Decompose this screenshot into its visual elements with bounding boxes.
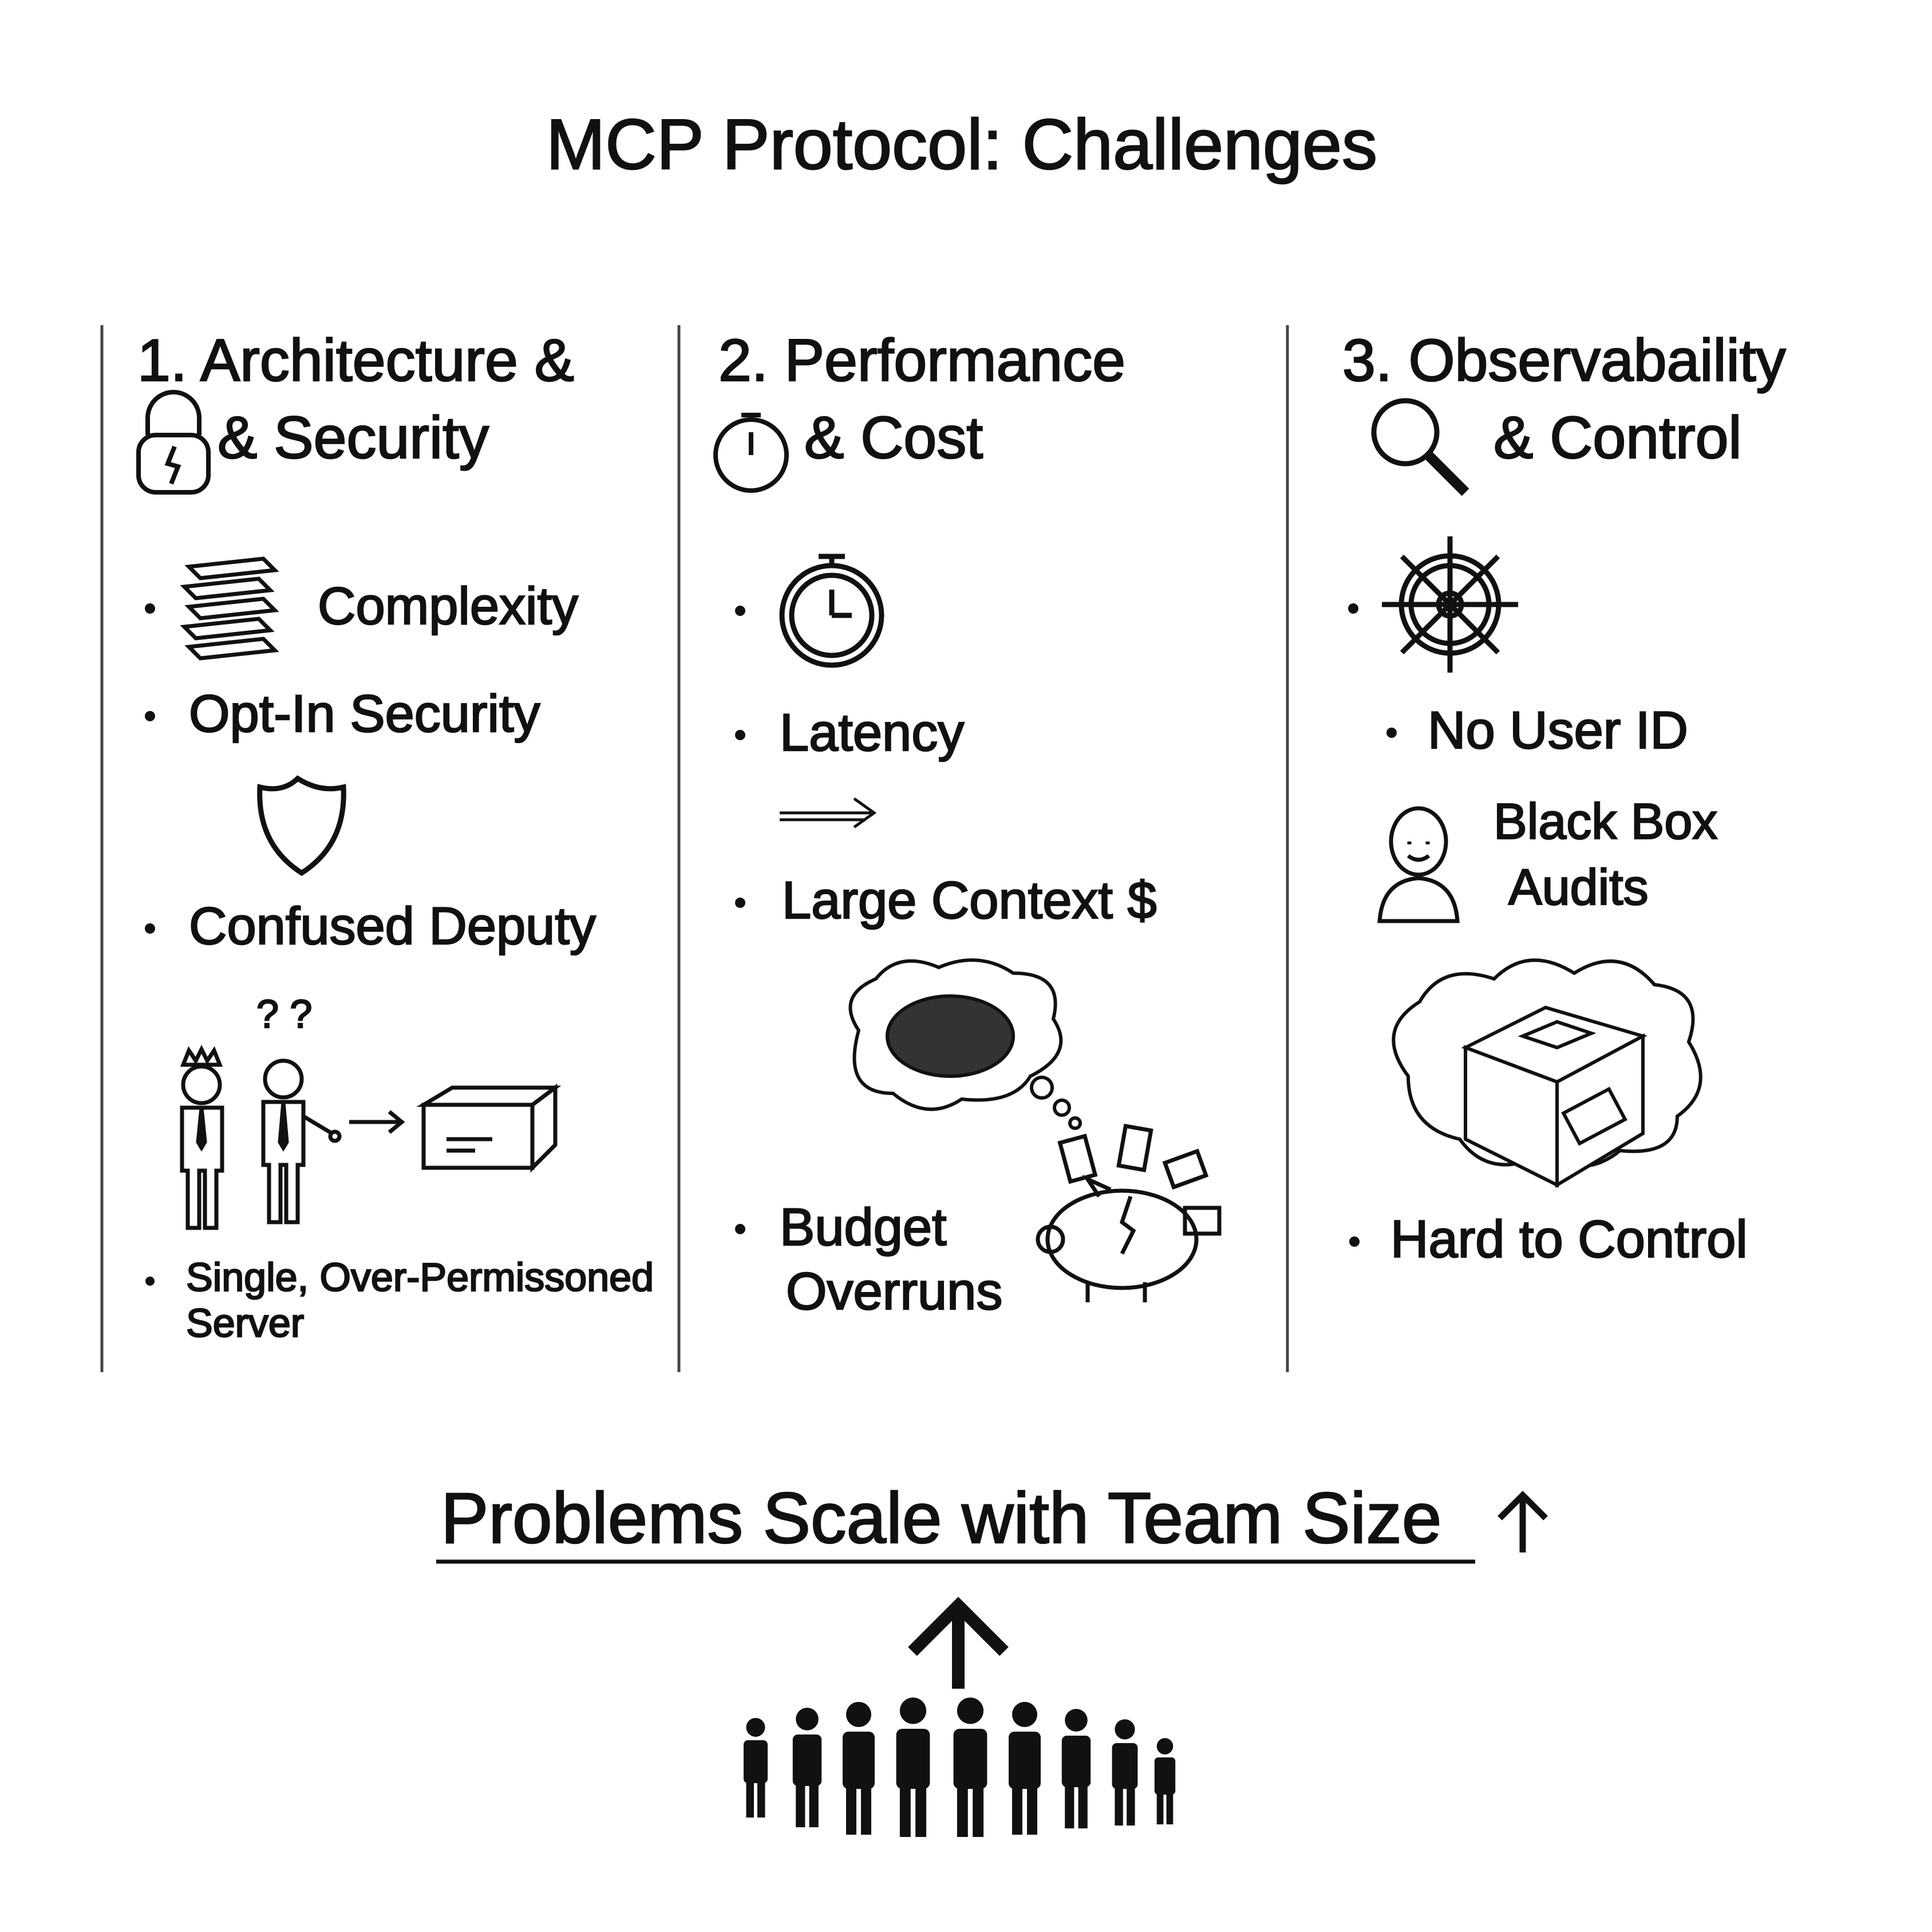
arrow — [780, 799, 874, 827]
icon: magnifier — [1374, 401, 1465, 492]
item: no user id: No User ID — [1428, 701, 1688, 760]
icon: small up arrow — [1500, 1495, 1546, 1552]
icon: small stopwatch — [716, 415, 787, 491]
icon: broken padlock — [139, 392, 208, 492]
heading: performance: 2. Performance — [718, 327, 1125, 394]
item: single over-permissoned server: Server — [186, 1301, 304, 1345]
heading line 2: & Cost — [804, 405, 983, 471]
icon: broken piggy bank — [1038, 1126, 1219, 1302]
item: budget overruns — [735, 1198, 1002, 1321]
arrow: big up — [912, 1606, 1004, 1689]
illustration: confused deputy — [182, 1049, 555, 1228]
panel: performance & cost — [716, 327, 1219, 1321]
icon: person — [1380, 808, 1457, 921]
icon: team people — [744, 1697, 1175, 1837]
item: confused deputy: Confused Deputy — [189, 897, 596, 955]
heading: architecture: 1. Architecture & — [137, 327, 574, 394]
heading: observability: 3. Observabaility — [1342, 327, 1786, 394]
item: complexity — [145, 559, 578, 658]
panel: architecture & security — [137, 327, 654, 1345]
item: budget overruns: Overruns — [786, 1262, 1002, 1321]
panel: architecture & security: ? ? — [256, 991, 312, 1036]
panel: observability & control: Audits — [1508, 859, 1649, 915]
item: latency: Latency — [780, 704, 964, 762]
icon: shield — [260, 779, 343, 873]
bottom headline: Problems Scale with Team Size — [441, 1479, 1441, 1558]
item: complexity: Complexity — [318, 577, 578, 635]
item: opt-in security: Opt-In Security — [189, 685, 540, 743]
icon: ship wheel — [1348, 536, 1518, 673]
heading line 2: & Security — [218, 405, 489, 471]
heading line 2: & Control — [1494, 405, 1742, 471]
panel: observability & control — [1342, 327, 1786, 1269]
icon: stopwatch — [735, 556, 882, 665]
icon: scribble thought cloud — [850, 960, 1080, 1128]
item: hard to control: Hard to Control — [1390, 1210, 1748, 1269]
item: single over-permissoned server: Single, Over-Permissoned — [186, 1255, 654, 1299]
item: large context: Large Context $ — [782, 871, 1157, 930]
item: single over-permissoned server — [145, 1255, 654, 1345]
item: budget overruns: Budget — [780, 1198, 947, 1257]
item: black box audits: Black Box — [1494, 793, 1717, 850]
icon: box in cloud — [1393, 960, 1701, 1185]
title: MCP Protocol: Challenges — [546, 105, 1377, 184]
